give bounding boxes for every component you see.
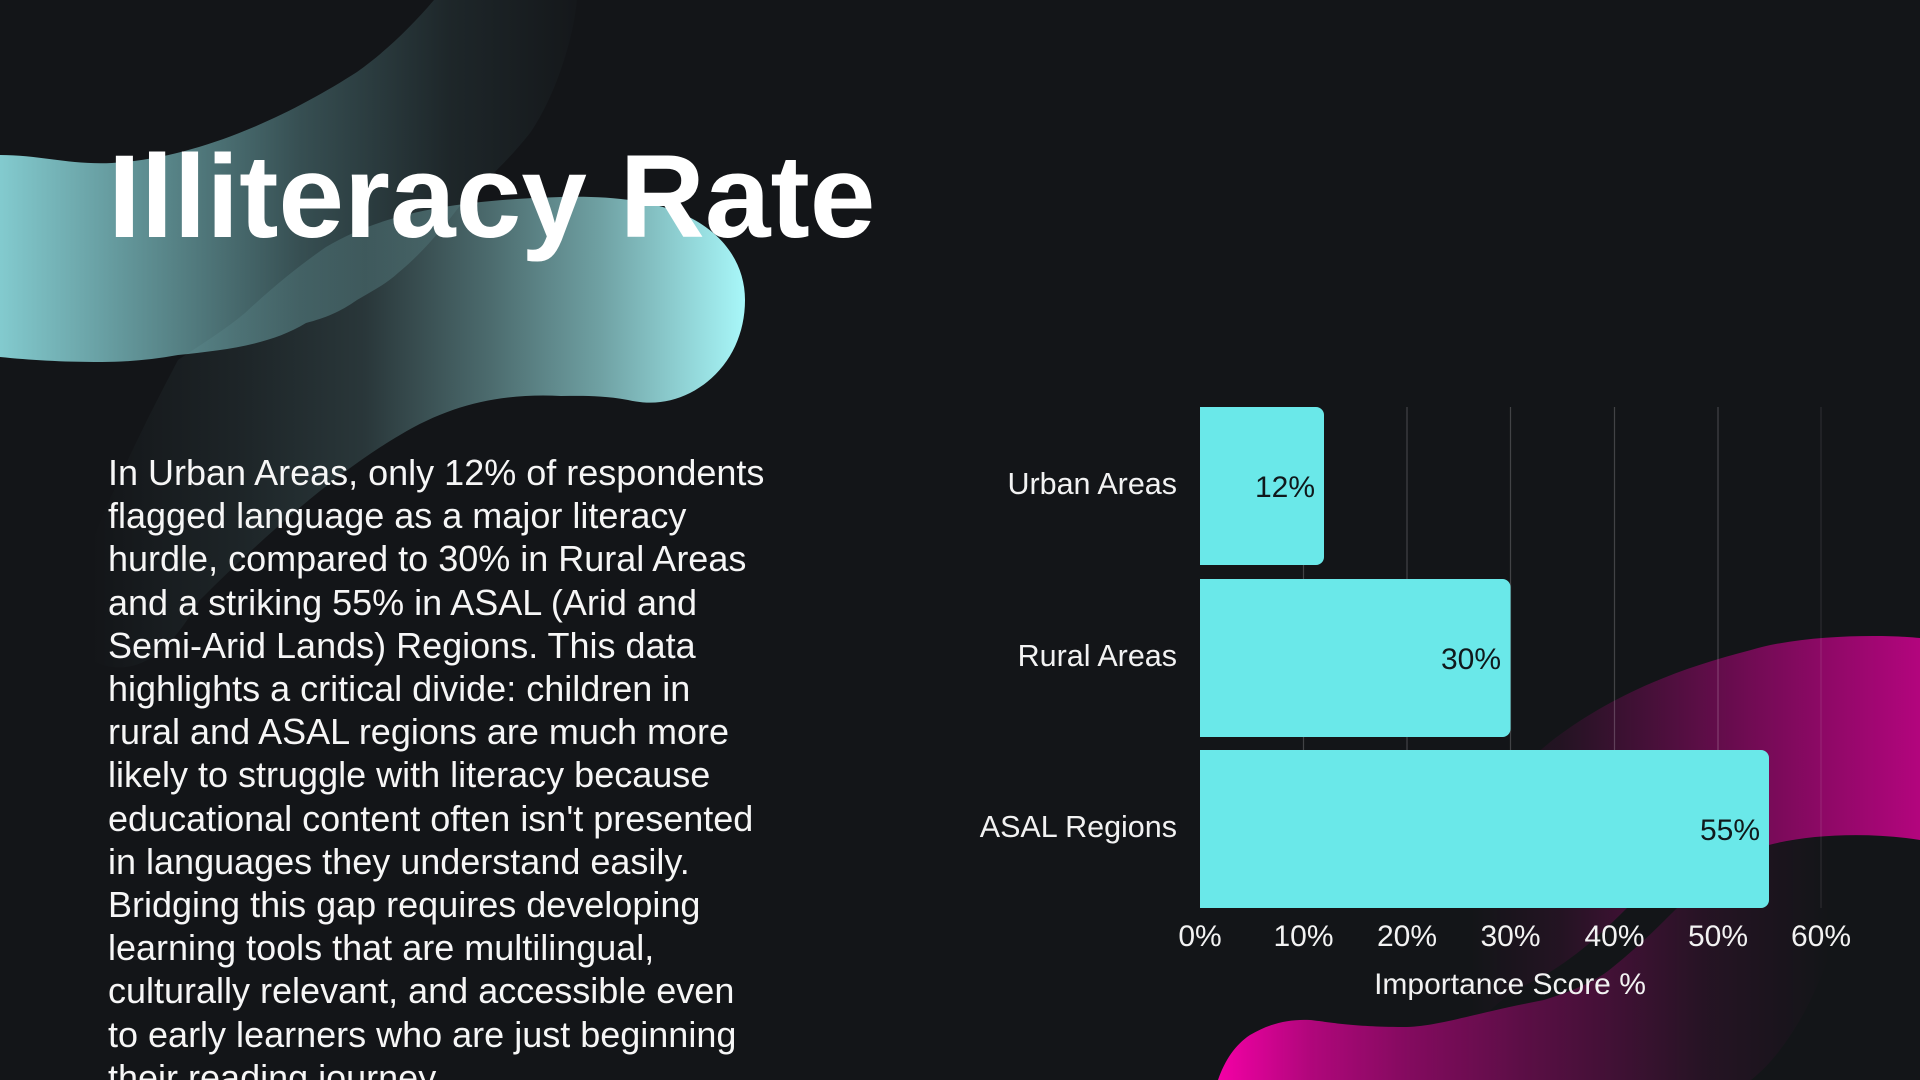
x axis tick labels: 50%	[1688, 920, 1748, 953]
category labels: Rural Areas	[1018, 639, 1177, 673]
body text block: likely to struggle with literacy because	[108, 754, 710, 795]
bar: Urban Areas 12%	[1200, 407, 1324, 565]
category labels: Urban Areas	[1007, 467, 1177, 501]
bar: Rural Areas 30%: 30%	[1441, 643, 1501, 676]
body text block: flagged language as a major literacy	[108, 495, 686, 536]
category labels: ASAL Regions	[980, 810, 1177, 844]
x axis tick labels: 30%	[1480, 920, 1541, 953]
body text block: hurdle, compared to 30% in Rural Areas	[108, 538, 746, 579]
body text block: in languages they understand easily.	[108, 841, 690, 882]
x axis tick labels: 20%	[1377, 920, 1437, 953]
body text block: highlights a critical divide: children in	[108, 668, 690, 709]
body text block: culturally relevant, and accessible even	[108, 970, 734, 1011]
pink ribbon: right edge	[1370, 636, 1920, 1080]
bar: Urban Areas 12%: 12%	[1255, 471, 1315, 504]
bar: ASAL Regions 55%	[1200, 750, 1769, 908]
teal ribbon: centre with bright tip	[60, 197, 745, 667]
x axis tick labels: 40%	[1584, 920, 1645, 953]
body text block: educational content often isn't presented	[108, 798, 753, 839]
category labels	[980, 467, 1177, 844]
body text block: learning tools that are multilingual,	[108, 927, 654, 968]
body text block: In Urban Areas, only 12% of respondents	[108, 452, 764, 493]
x axis tick labels: 10%	[1273, 920, 1334, 953]
title: Illiteracy Rate	[108, 131, 875, 263]
pink ribbon: bottom with bright tip	[1218, 830, 1850, 1080]
body text block: to early learners who are just beginning	[108, 1014, 736, 1055]
body text block: Semi-Arid Lands) Regions. This data	[108, 625, 696, 666]
x axis tick labels: 0%	[1178, 920, 1222, 953]
body text block: rural and ASAL regions are much more	[108, 711, 729, 752]
teal ribbon: top left	[0, 0, 577, 362]
body text block: Bridging this gap requires developing	[108, 884, 700, 925]
x axis tick labels: 60%	[1791, 920, 1851, 953]
body text block: and a striking 55% in ASAL (Arid and	[108, 582, 697, 623]
x axis tick labels	[1178, 920, 1851, 953]
x axis title: Importance Score %	[1374, 968, 1646, 1001]
bar: Rural Areas 30%	[1200, 579, 1510, 737]
body text block	[108, 452, 764, 1080]
bar: ASAL Regions 55%: 55%	[1700, 814, 1760, 847]
